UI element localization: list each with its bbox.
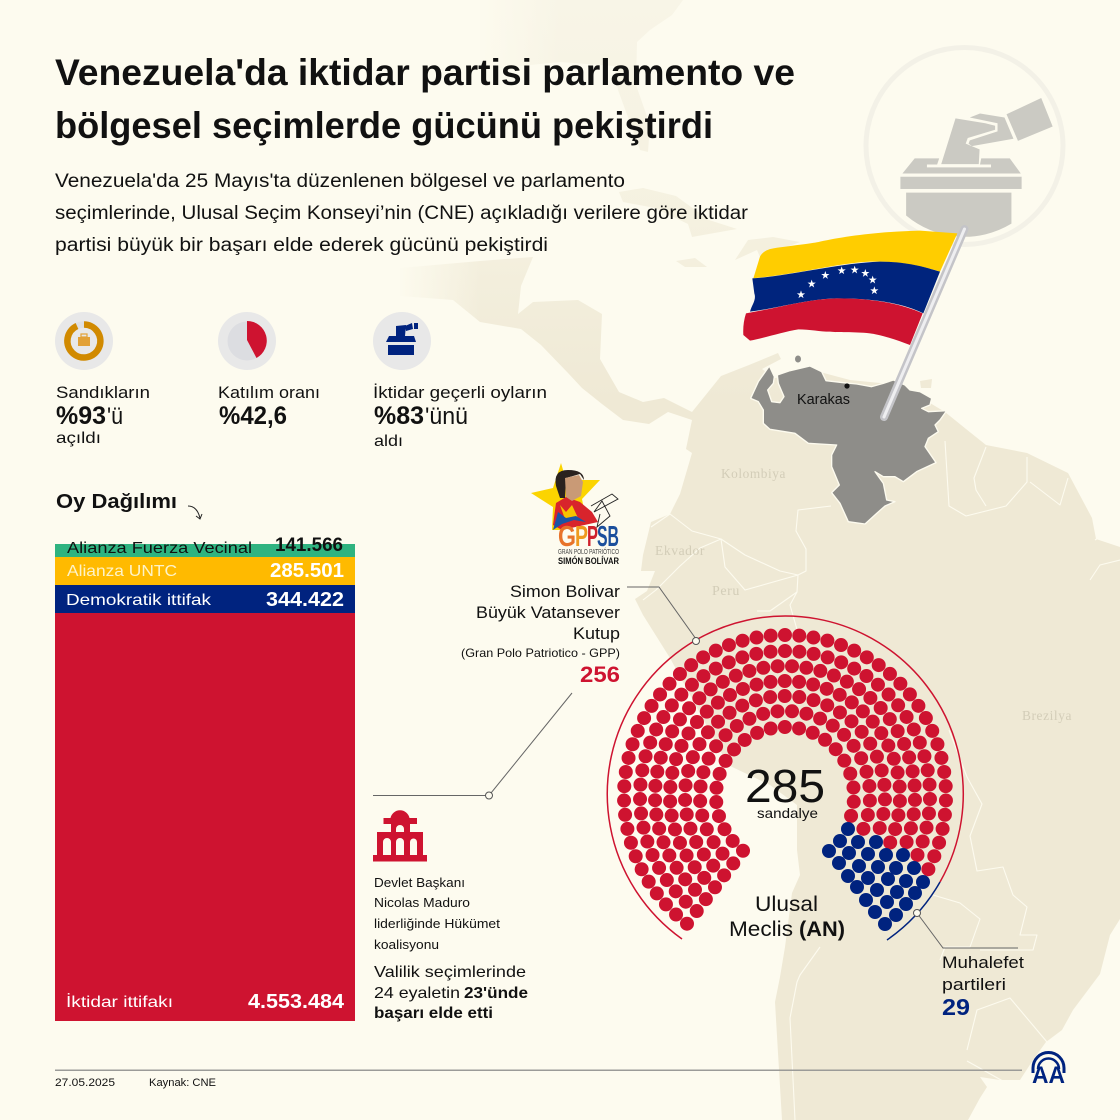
text: governorship result: başarı elde etti [374,1005,493,1022]
node: left leader [486,792,492,799]
seat count: sandalye [757,805,818,821]
stat: turnout [218,383,320,430]
stat: valid votes [373,383,547,450]
country label: Ekvador: Ekvador [655,544,705,559]
intro text: seçimlerinde, Ulusal Seçim Konseyi’nin (CNE) açıkladığı verilere göre iktidar [55,203,749,224]
map: Venezuela with Karakas [751,356,947,524]
callout: ruling coalition label: Kutup [573,624,620,643]
text: government coalition note: koalisyonu [374,937,439,952]
title: Venezuela'da iktidar partisi parlamento ve [55,52,795,93]
stacked bar: vote distribution: Alianza Fuerza Vecinal [67,540,252,557]
map: country borders [643,441,1120,1120]
callout: ruling coalition label: (Gran Polo Patriotico - GPP) [461,646,620,660]
callout: opposition: Muhalefet [942,953,1024,972]
icon: flag pole [884,229,964,417]
stat: valid votes: 'ünü [425,403,468,430]
stacked bar: vote distribution: 285.501 [270,560,344,582]
text: governorship result: 23'ünde [464,985,528,1002]
logo: GPPSB: SIMÓN BOLÍVAR [558,555,619,566]
stacked bar: vote distribution [55,535,355,1021]
callout: opposition: partileri [942,975,1006,994]
country label: Brezilya: Brezilya [1022,709,1072,724]
icon: large ballot box in ring [866,48,1063,244]
stacked bar: vote distribution: İktidar ittifakı [66,992,173,1011]
stat: valid votes: İktidar geçerli oyların [373,383,547,402]
logo: AA: AA [1032,1062,1065,1089]
icon: Venezuelan flag [743,231,957,345]
logo: GPPSB: G [558,521,576,553]
node: ruling arc [692,638,700,644]
stat: turnout: %42,6 [219,402,287,430]
seats: ruling coalition 256 [624,635,946,924]
footer: date: 27.05.2025 [55,1077,115,1089]
stacked bar: vote distribution: Demokratik ittifak [66,592,212,609]
text: governorship result [374,964,528,1022]
title: bölgesel seçimlerde gücünü pekiştirdi [55,105,713,146]
text: government coalition note: Devlet Başkanı [374,875,465,890]
icon: government palace [373,810,427,862]
icon: ruling party ballot [373,312,431,370]
stat: ballot boxes: %93 [56,402,106,430]
logo: GPPSB [531,463,619,566]
footer: source: Kaynak: CNE [149,1077,216,1089]
map: top land fade [470,0,560,80]
stat: valid votes: aldı [374,433,403,450]
stacked bar: vote distribution: 4.553.484 [248,991,345,1013]
icon: turnout pie [218,312,276,370]
intro text: Venezuela'da 25 Mayıs'ta düzenlenen bölgesel ve parlamento [55,171,625,192]
country label: Peru: Peru [712,584,740,599]
heading: vote distribution: Oy Dağılımı [56,491,177,513]
stacked bar: vote distribution: Alianza UNTC [67,563,177,580]
map: west land fade [395,250,480,330]
arc: opposition seats outline [887,882,940,940]
seat count: 285 [745,760,825,812]
logo: GPPSB: P [575,521,588,553]
arrow [188,506,202,519]
leader lines [373,587,1018,948]
logo: GPPSB: P [587,521,598,553]
stat: ballot boxes: 'ü [107,403,123,430]
intro text [55,171,749,256]
chart label: national assembly: Meclis [729,918,793,941]
stat: valid votes: %83 [374,402,424,430]
callout: ruling coalition label: Simon Bolivar [510,582,620,601]
text: governorship result: 24 eyaletin [374,985,460,1002]
callout: ruling coalition label: Büyük Vatansever [476,603,620,622]
callout: opposition: 29 [942,994,970,1020]
footer rule [55,1070,1022,1071]
arc: ruling seats outline [607,616,963,939]
map: Venezuela with Karakas: Karakas [797,392,850,408]
text: government coalition note: liderliğinde Hükümet [374,916,500,931]
stacked bar: vote distribution: 141.566 [275,535,343,556]
stat: ballot boxes: Sandıkların [56,383,150,402]
stacked bar: vote distribution: 344.422 [266,589,344,611]
chart label: national assembly [729,893,845,941]
node: opposition arc [914,910,920,916]
stat: ballot boxes: açıldı [56,430,101,447]
text: governorship result: Valilik seçimlerinde [374,964,526,981]
map: Americas land [400,0,1120,1120]
stat: turnout: Katılım oranı [218,383,320,402]
seats: opposition 29 [822,822,930,931]
callout: ruling coalition label: 256 [580,662,620,687]
logo: GPPSB: GRAN POLO PATRIÓTICO [558,547,619,556]
callout: ruling coalition label [461,582,620,687]
title [55,52,795,146]
text: government coalition note [374,875,500,952]
text: government coalition note: Nicolas Maduro [374,895,470,910]
country label: Kolombiya: Kolombiya [721,467,786,482]
intro text: partisi büyük bir başarı elde ederek gücünü pekiştirdi [55,235,548,256]
stat: ballot boxes [56,383,150,447]
callout: opposition [942,953,1024,1020]
chart label: national assembly: (AN) [799,918,845,941]
icon: donut ballot boxes opened [55,312,113,370]
logo: GPPSB: SB [597,521,619,553]
chart label: national assembly: Ulusal [755,893,818,916]
chart: parliament seats [607,616,963,940]
